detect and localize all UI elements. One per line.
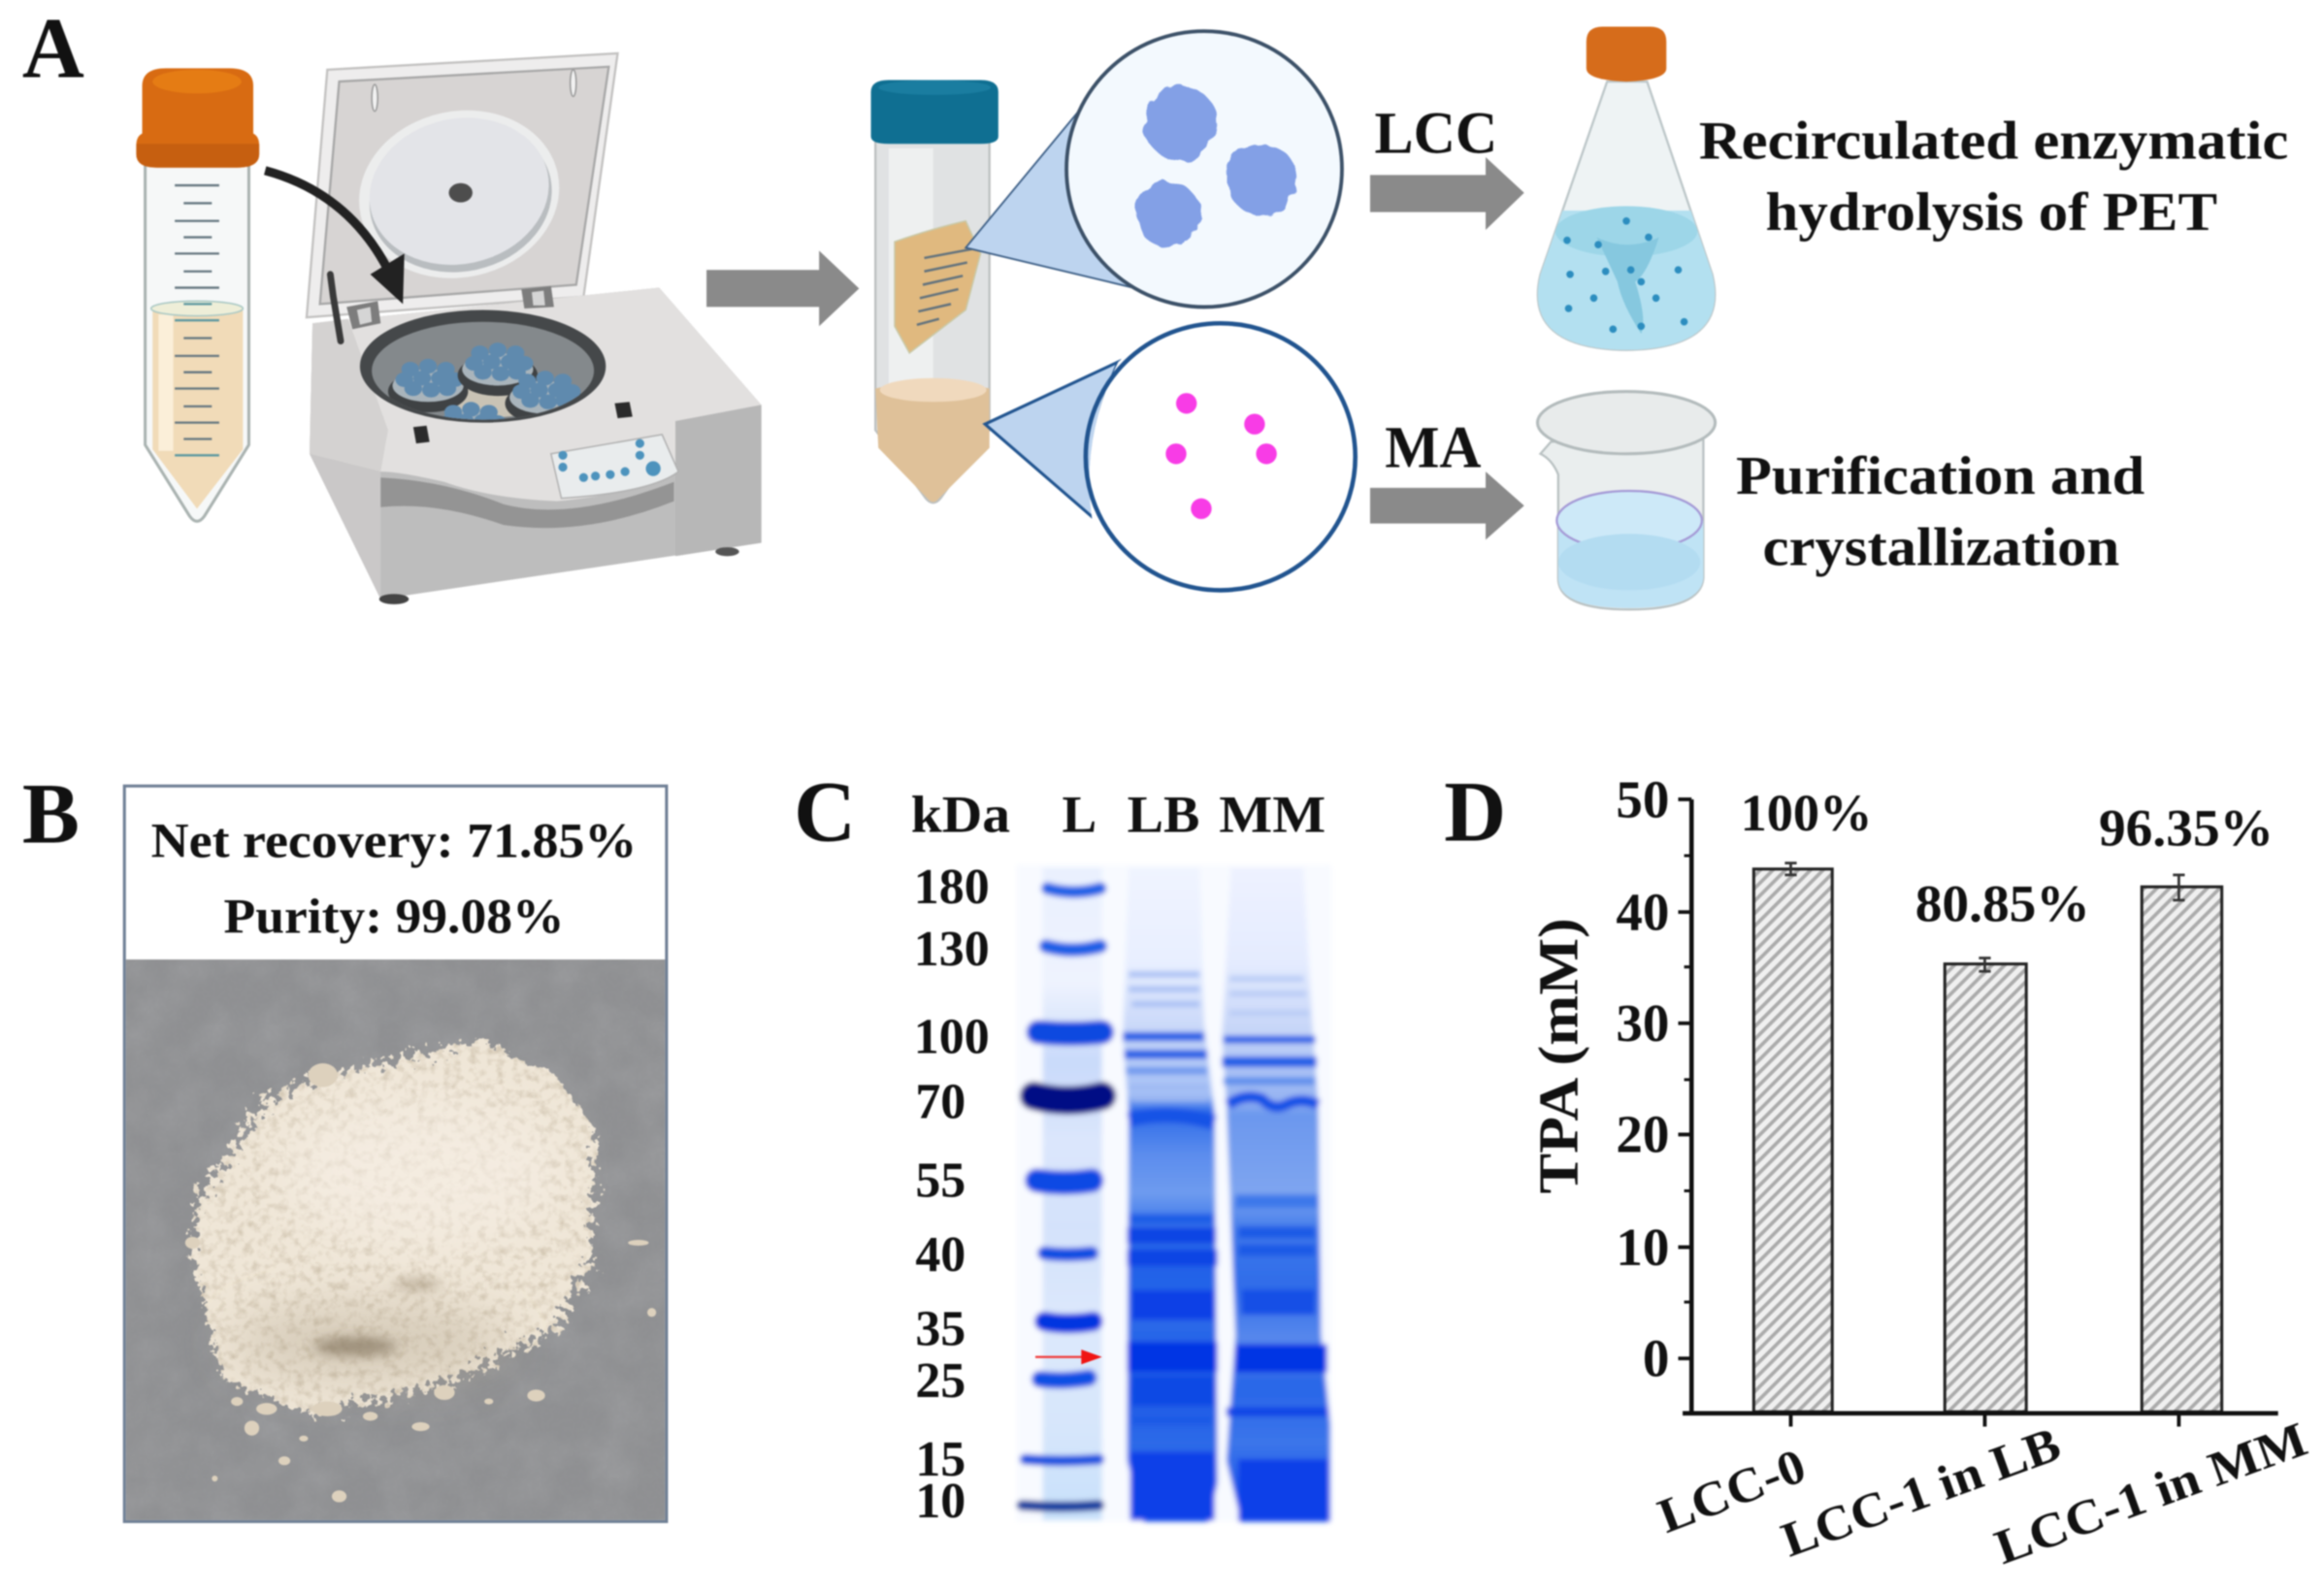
y tick labels: 10 [1616,1218,1669,1277]
molecular weight labels: 180 [914,860,990,915]
text: purification and crystallization: Purification and [1736,446,2144,506]
panel C: SDS-PAGE gel [794,765,1331,1529]
x tick labels: LCC-1 in MM [1987,1412,2314,1575]
lane headers [911,786,1326,844]
bars [1753,869,2222,1412]
text: recirculated enzymatic hydrolysis: Recirculated enzymatic [1699,112,2288,172]
percentage labels: 80.85% [1915,874,2090,932]
label MA: MA [1385,415,1481,481]
percentage labels: 100% [1741,784,1872,842]
clips and hinges [330,275,633,443]
y axis title: TPA (mM) [1527,918,1590,1194]
molecular weight labels: 15 [915,1432,966,1487]
arrow: LCC [1370,157,1524,230]
text: recirculated enzymatic hydrolysis: hydrolysis of PET [1766,182,2217,243]
label B: B [22,766,80,861]
blobs: LCC protein [1136,86,1297,247]
icon: glass beaker [1537,392,1716,609]
y tick labels: 40 [1616,882,1669,941]
percentage labels: 96.35% [2099,798,2274,857]
panel A: workflow [22,1,2288,609]
y tick labels: 20 [1616,1105,1669,1164]
photo: powder on grey surface [126,959,665,1520]
callout: LCC magnified circle [1066,31,1342,307]
panel B: recovered product photo [22,766,667,1521]
centrifuge lid [307,53,618,317]
label C: C [794,765,856,861]
powder crumbs [185,1063,656,1503]
label D: D [1444,765,1506,861]
y tick labels: 30 [1616,993,1669,1053]
x tick labels: LCC-0 [1651,1438,1813,1543]
powder pile [191,1040,596,1414]
molecular weight labels: 55 [915,1153,966,1209]
sample lane MM [1222,867,1330,1521]
error bars [1784,863,2185,971]
molecular weight labels: 25 [915,1353,966,1409]
arrow: tube into centrifuge [265,171,405,304]
icon: benchtop centrifuge [307,53,762,604]
lane headers: LB [1128,786,1199,844]
x tick labels [1651,1412,2314,1575]
frame and caption: Net recovery: 71.85% [151,814,637,868]
y tick labels [1616,769,1669,1388]
molecular weight labels: 35 [915,1301,966,1356]
arrow: MA [1370,471,1524,539]
lane headers: kDa [911,786,1010,844]
gel image [1016,864,1331,1521]
x tick labels: LCC-1 in LB [1775,1416,2067,1567]
text: purification and crystallization [1736,446,2144,577]
text: purification and crystallization: crystallization [1762,517,2119,577]
sample lane LB [1123,867,1218,1521]
text: recirculated enzymatic hydrolysis [1699,112,2288,243]
y tick labels: 0 [1643,1329,1669,1388]
label A: A [22,1,84,97]
molecular weight labels: 40 [915,1227,966,1283]
molecular weight labels: 130 [914,922,990,977]
lane headers: L [1062,786,1097,844]
dots: MA molecules [1165,393,1277,519]
arrow: red target band marker [1035,1349,1102,1364]
rotor bowl [359,309,607,424]
icon: Erlenmeyer flask [1536,25,1717,351]
label LCC: LCC [1375,101,1497,166]
callout: lower zoom cone [985,362,1118,519]
lane headers: MM [1219,786,1326,844]
frame and caption [124,786,667,1521]
molecular weight labels: 100 [914,1009,990,1064]
icon: orange-capped sample tube [136,68,259,521]
molecular weight labels: 70 [915,1075,966,1130]
panel D: TPA bar chart [1444,765,2314,1575]
molecular weight labels [914,860,990,1529]
percentage labels [1741,784,2274,932]
callout: MA magnified circle [1086,323,1356,595]
y tick labels: 50 [1616,769,1669,828]
frame and caption: Purity: 99.08% [223,889,565,944]
axes [1678,799,2278,1427]
callout: upper zoom cone [966,110,1133,288]
molecular weight labels: 10 [915,1474,966,1529]
control panel [551,435,678,499]
centrifuge base [310,288,762,600]
arrow: centrifugation to separated tube [706,250,859,326]
icon: separated blue-capped tube [871,81,998,503]
ladder lane L [1022,867,1102,1520]
